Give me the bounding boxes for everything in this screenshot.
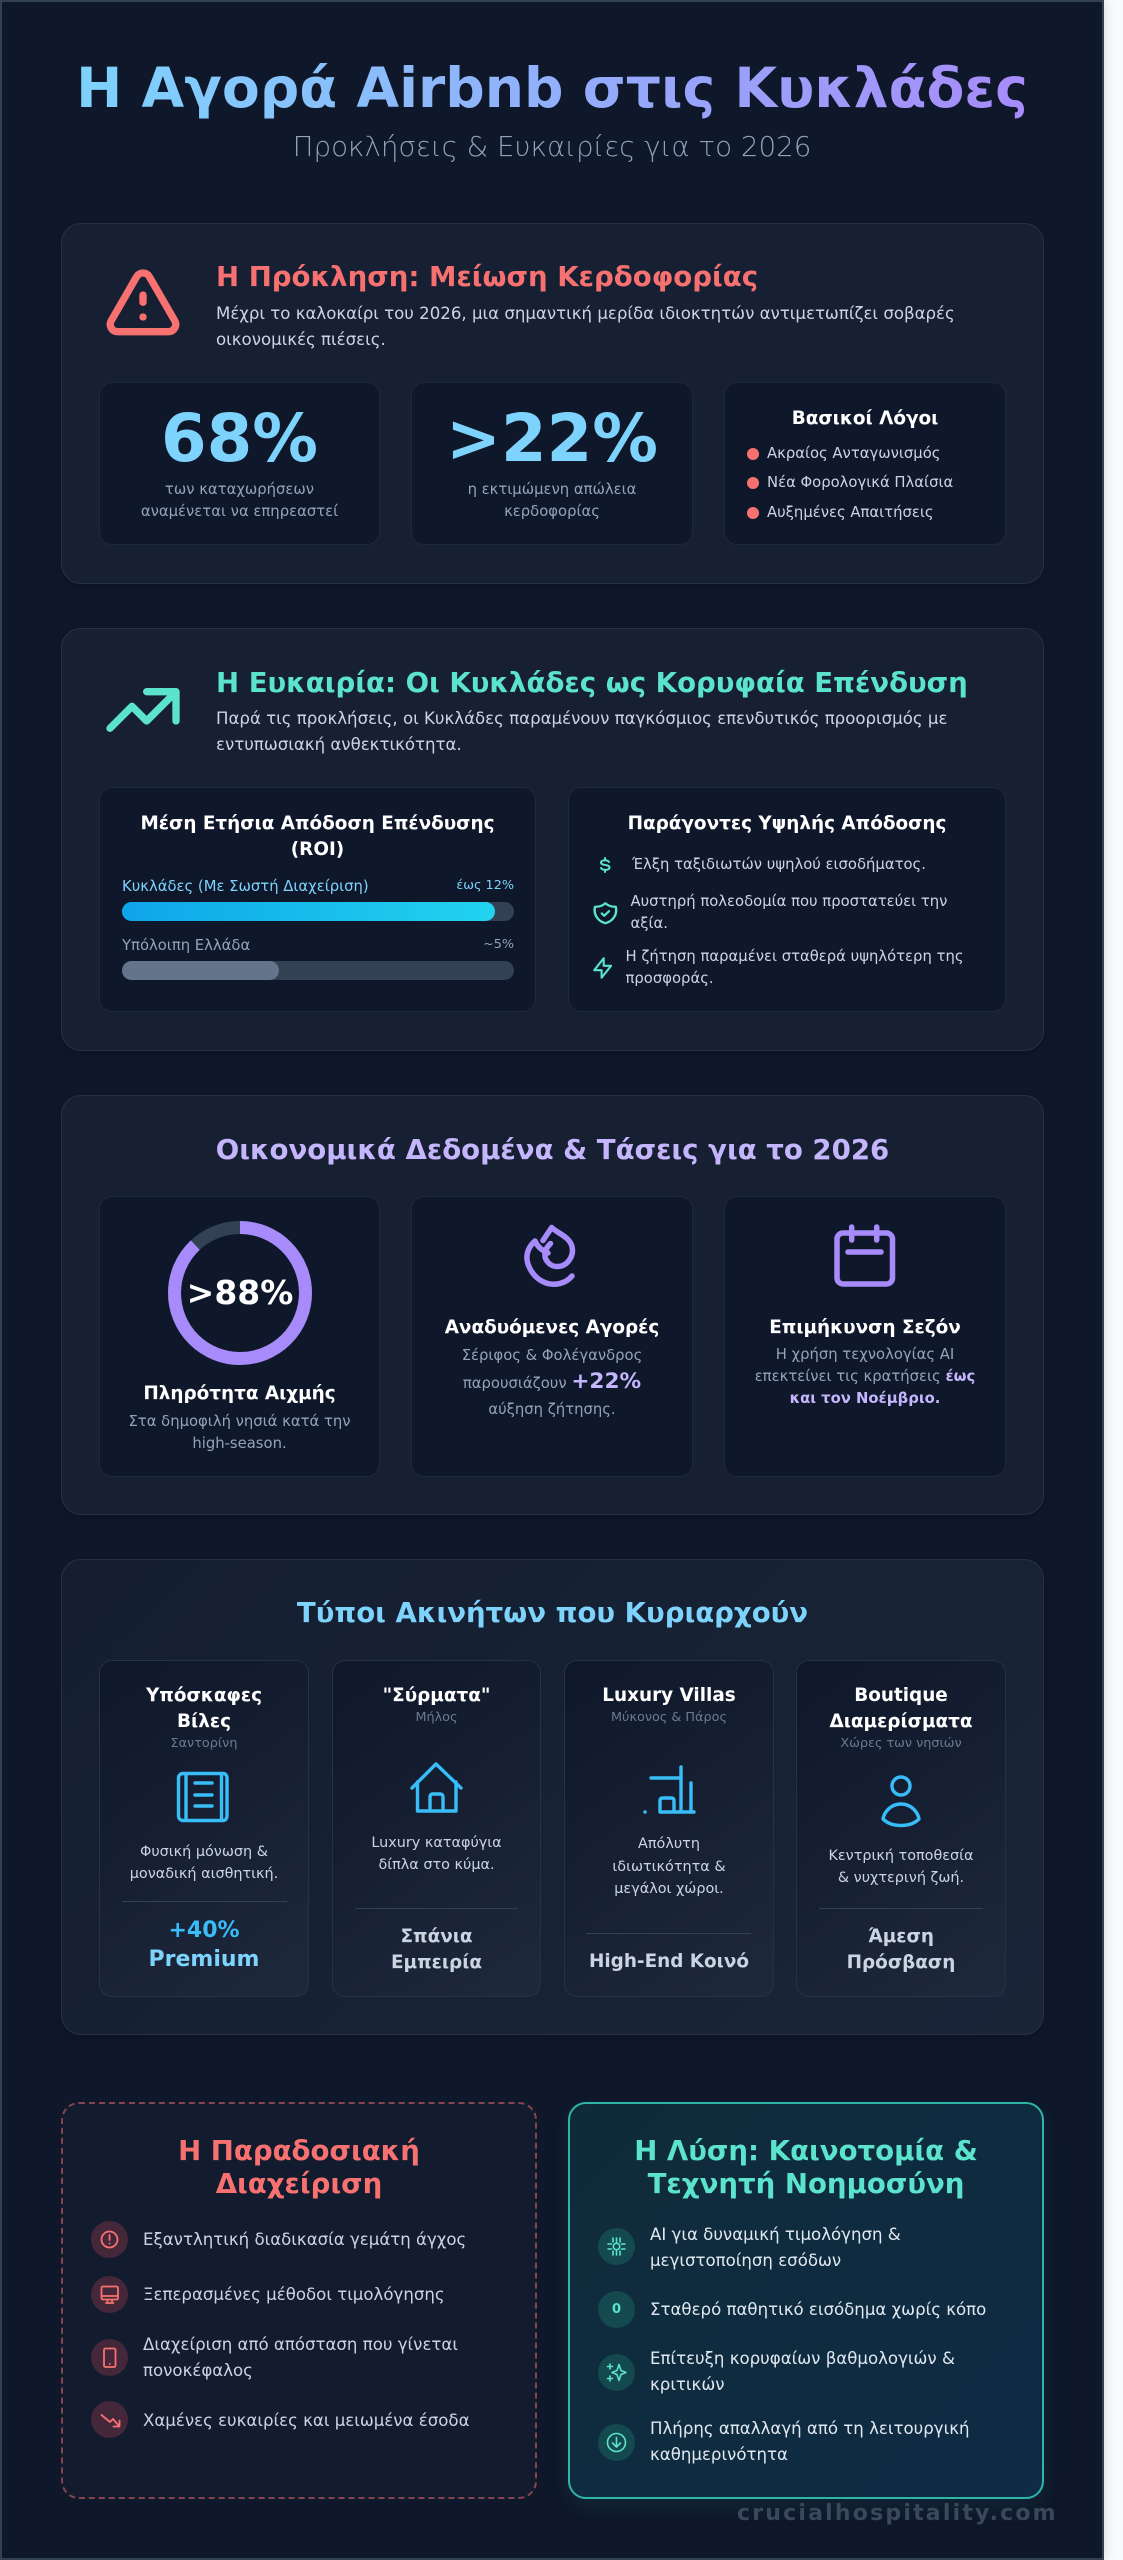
divider — [122, 1901, 287, 1902]
text — [650, 2346, 955, 2397]
text: Χαμένες ευκαιρίες και μειωμένα έσοδα — [143, 2411, 470, 2430]
text: μεγιστοποίηση εσόδων — [650, 2250, 841, 2270]
heading: Μέση Ετήσια Απόδοση Επένδυσης — [140, 813, 495, 834]
heading: financial data: Οικονομικά Δεδομένα & Τάσεις για το 2026 — [216, 1133, 889, 1166]
icon: alert — [91, 2221, 128, 2258]
boutique apartments title: Boutique — [854, 1685, 948, 1706]
icon: trending up — [106, 688, 180, 732]
card: emerging markets — [411, 1196, 693, 1477]
cave villas description: Φυσική μόνωση & — [140, 1844, 268, 1860]
text: opportunity intro: εντυπωσιακή ανθεκτικότητα. — [216, 735, 462, 754]
factor 2 — [630, 893, 947, 932]
emerging markets text: αύξηση ζήτησης. — [488, 1401, 616, 1418]
icon: zero: 0 — [612, 2302, 621, 2317]
value: rest of Greece: ~5% — [483, 937, 514, 952]
factor 2: αξία. — [630, 915, 668, 932]
boutique apartments description: & νυχτερινή ζωή. — [838, 1870, 964, 1886]
boutique apartments title — [830, 1685, 972, 1732]
luxury villas description: μεγάλοι χώροι. — [614, 1881, 724, 1897]
card: boutique apartments — [796, 1660, 1006, 1997]
divider — [586, 1933, 751, 1934]
text: Εξαντλητική διαδικασία γεμάτη άγχος — [143, 2230, 466, 2249]
factor 2: Αυστηρή πολεοδομία που προστατεύει την — [630, 893, 947, 910]
heading: opportunity: Η Ευκαιρία: Οι Κυκλάδες ως Κορυφαία Επένδυση — [216, 666, 968, 699]
icon: person — [881, 1775, 921, 1828]
bar: Cyclades — [122, 902, 514, 921]
text: challenge intro: Μέχρι το καλοκαίρι του 2026, μια σημαντική μερίδα ιδιοκτητών αντιμετωπίζει σοβαρές — [216, 304, 955, 323]
text: πονοκέφαλος — [143, 2361, 253, 2380]
occupancy caption — [128, 1413, 351, 1452]
syrmata highlight — [391, 1926, 482, 1973]
boutique apartments location: Χώρες των νησιών — [840, 1736, 962, 1751]
heading: Παράγοντες Υψηλής Απόδοσης — [628, 813, 946, 834]
card: cave villas — [99, 1660, 309, 1997]
subtitle: Προκλήσεις & Ευκαιρίες για το 2026 — [293, 130, 811, 163]
cave villas highlight — [149, 1918, 259, 1972]
luxury villas description: ιδιωτικότητα & — [612, 1858, 726, 1874]
card: syrmata — [332, 1660, 541, 1997]
bar: rest of Greece — [122, 961, 514, 980]
heading: AI solution — [568, 2134, 1044, 2200]
heading: (ROI) — [291, 839, 344, 860]
reason 2: Νέα Φορολογικά Πλαίσια — [767, 474, 953, 491]
stat card: 68% — [99, 382, 380, 545]
item: remote management — [91, 2335, 458, 2380]
panel: property types — [61, 1559, 1044, 2035]
icon: newspaper — [176, 1772, 229, 1822]
item: outdated pricing — [91, 2276, 445, 2313]
panel: traditional management — [61, 2102, 537, 2499]
syrmata description: Luxury καταφύγια — [371, 1835, 502, 1851]
cave villas title — [146, 1685, 262, 1732]
season extension text: και τον Νοέμβριο. — [790, 1390, 940, 1407]
heading: traditional management: Διαχείριση — [216, 2167, 382, 2200]
stat card: >22% — [411, 382, 693, 545]
text: Σταθερό παθητικό εισόδημα χωρίς κόπο — [650, 2300, 986, 2319]
icon: zero — [598, 2291, 635, 2328]
luxury villas description: Απόλυτη — [638, 1836, 700, 1852]
syrmata highlight: Σπάνια — [400, 1926, 473, 1947]
caption — [468, 481, 636, 520]
icon: dollar — [600, 857, 610, 873]
text — [143, 2335, 458, 2380]
item: stress — [91, 2221, 466, 2258]
season extension text: Η χρήση τεχνολογίας AI — [776, 1346, 954, 1363]
text — [650, 2416, 970, 2467]
heading: traditional management: Η Παραδοσιακή — [178, 2134, 420, 2167]
syrmata description: δίπλα στο κύμα. — [378, 1857, 495, 1873]
boutique apartments highlight — [847, 1926, 955, 1973]
text: κριτικών — [650, 2374, 724, 2394]
text: opportunity intro: Παρά τις προκλήσεις, οι Κυκλάδες παραμένουν παγκόσμιος επενδυτικός προορισμός με — [216, 709, 947, 728]
syrmata title: "Σύρματα" — [383, 1685, 490, 1706]
heading: traditional management — [178, 2134, 420, 2200]
syrmata description — [371, 1835, 502, 1873]
cave villas description — [130, 1844, 278, 1882]
boutique apartments title: Διαμερίσματα — [830, 1711, 972, 1732]
card: return factors — [568, 787, 1006, 1012]
season extension text — [755, 1346, 975, 1407]
icon: house — [410, 1762, 463, 1813]
value: Cyclades: έως 12% — [456, 878, 514, 893]
factor 3 — [626, 948, 964, 987]
divider — [819, 1908, 983, 1909]
card: season extension — [724, 1196, 1006, 1477]
luxury villas highlight: High-End Κοινό — [589, 1951, 749, 1972]
factor 3: Η ζήτηση παραμένει σταθερά υψηλότερη της — [626, 948, 964, 965]
text: opportunity intro — [216, 709, 947, 754]
number: >22% — [446, 401, 658, 477]
icon: chip — [598, 2228, 635, 2265]
icon: villa — [643, 1765, 696, 1814]
text: καθημερινότητα — [650, 2444, 788, 2464]
card: luxury villas — [564, 1660, 774, 1997]
emerging markets title: Αναδυόμενες Αγορές — [445, 1317, 659, 1338]
item: passive income — [598, 2291, 1028, 2329]
cave villas highlight: Premium — [149, 1947, 259, 1972]
heading: AI solution: Τεχνητή Νοημοσύνη — [648, 2167, 964, 2200]
cave villas highlight: +40% — [168, 1918, 240, 1943]
heading: AI solution: Η Λύση: Καινοτομία & — [634, 2134, 978, 2167]
label: rest of Greece: Υπόλοιπη Ελλάδα — [122, 937, 250, 954]
icon: phone — [91, 2339, 128, 2376]
icon: trending down — [91, 2401, 128, 2438]
factor 1: Έλξη ταξιδιωτών υψηλού εισοδήματος. — [632, 856, 926, 873]
caption — [141, 481, 338, 520]
boutique apartments highlight: Άμεση — [868, 1926, 934, 1947]
heading: property types: Τύποι Ακινήτων που Κυριαρχούν — [297, 1596, 808, 1629]
card: occupancy — [99, 1196, 380, 1477]
heading — [140, 813, 495, 860]
factor 3: προσφοράς. — [626, 970, 714, 987]
boutique apartments description — [828, 1848, 974, 1886]
panel: opportunity — [61, 628, 1044, 1051]
boutique apartments description: Κεντρική τοποθεσία — [828, 1848, 974, 1864]
season extension text: επεκτείνει τις κρατήσεις έως — [755, 1368, 975, 1385]
luxury villas title: Luxury Villas — [602, 1685, 736, 1706]
syrmata highlight: Εμπειρία — [391, 1952, 482, 1973]
icon: shield — [593, 902, 618, 924]
caption: η εκτιμώμενη απώλεια — [468, 481, 636, 498]
occupancy title: Πληρότητα Αιχμής — [143, 1383, 336, 1404]
icon: download circle — [598, 2424, 635, 2461]
text: Ξεπερασμένες μέθοδοι τιμολόγησης — [143, 2285, 445, 2304]
cave villas title: Υπόσκαφες — [146, 1685, 262, 1706]
season extension title: Επιμήκυνση Σεζόν — [769, 1317, 961, 1338]
item: operations relief — [598, 2416, 1028, 2466]
text: Διαχείριση από απόσταση που γίνεται — [143, 2335, 458, 2354]
card: key reasons — [724, 382, 1006, 545]
occupancy caption: Στα δημοφιλή νησιά κατά την — [128, 1413, 351, 1430]
heading: challenge: Η Πρόκληση: Μείωση Κερδοφορίας — [216, 260, 758, 293]
luxury villas description — [612, 1836, 726, 1897]
emerging markets text — [462, 1347, 642, 1418]
item: AI pricing — [598, 2222, 1028, 2272]
icon: warning triangle — [106, 269, 180, 336]
panel: challenge — [61, 223, 1044, 584]
icon: fire — [524, 1224, 576, 1287]
text: AI για δυναμική τιμολόγηση & — [650, 2225, 901, 2244]
icon: sparkles — [598, 2354, 635, 2391]
text: challenge intro — [216, 304, 955, 349]
occupancy caption: high-season. — [192, 1435, 287, 1452]
panel: AI solution — [568, 2102, 1044, 2499]
icon: lightning — [593, 957, 612, 979]
card: ROI chart — [99, 787, 536, 1012]
item: top ratings — [598, 2346, 1028, 2396]
number: 68% — [161, 401, 318, 477]
emerging markets text: Σέριφος & Φολέγανδρος — [462, 1347, 642, 1364]
text — [650, 2222, 901, 2273]
item: lost opportunities — [91, 2401, 521, 2439]
ring chart: 88% — [168, 1221, 312, 1365]
text: Επίτευξη κορυφαίων βαθμολογιών & — [650, 2349, 955, 2368]
text: Πλήρης απαλλαγή από τη λειτουργική — [650, 2419, 970, 2438]
boutique apartments highlight: Πρόσβαση — [847, 1952, 955, 1973]
caption: αναμένεται να επηρεαστεί — [141, 503, 338, 520]
cave villas description: μοναδική αισθητική. — [130, 1866, 278, 1882]
syrmata location: Μήλος — [415, 1710, 458, 1725]
title: Η Αγορά Airbnb στις Κυκλάδες — [76, 57, 1028, 121]
emerging markets text: παρουσιάζουν +22% — [463, 1369, 641, 1394]
icon: calendar — [834, 1224, 896, 1287]
panel: financial data — [61, 1095, 1044, 1515]
luxury villas location: Μύκονος & Πάρος — [611, 1710, 727, 1725]
ring value: >88% — [187, 1273, 293, 1312]
label: Cyclades: Κυκλάδες (Με Σωστή Διαχείριση) — [122, 878, 369, 895]
cave villas title: Βίλες — [177, 1711, 231, 1732]
cave villas location: Σαντορίνη — [171, 1736, 237, 1751]
divider — [355, 1908, 518, 1909]
icon: monitor — [91, 2276, 128, 2313]
text: challenge intro: οικονομικές πιέσεις. — [216, 330, 386, 349]
watermark: crucialhospitality.com — [737, 2501, 1058, 2526]
reason 1: Ακραίος Ανταγωνισμός — [767, 445, 940, 462]
caption: κερδοφορίας — [504, 503, 600, 520]
caption: των καταχωρήσεων — [165, 481, 314, 498]
heading: Βασικοί Λόγοι — [792, 408, 938, 429]
reason 3: Αυξημένες Απαιτήσεις — [767, 504, 934, 521]
